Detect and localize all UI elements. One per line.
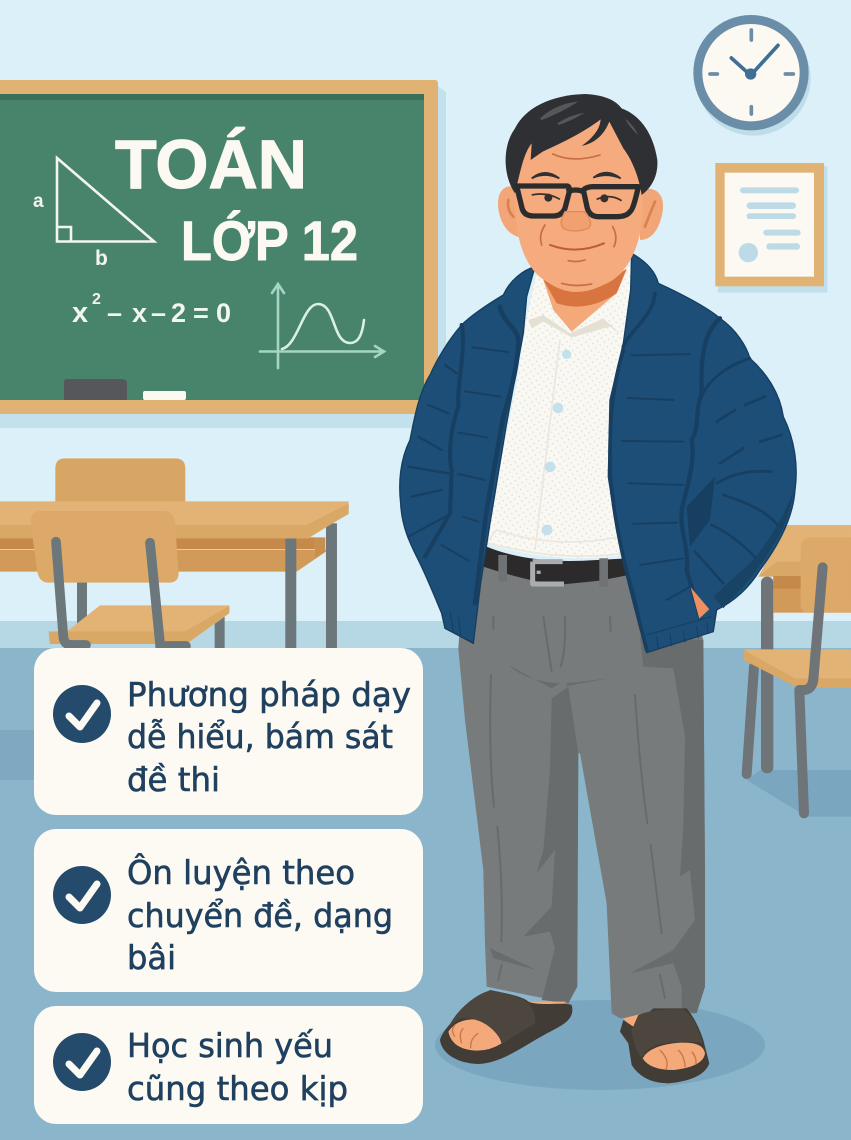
check icon [53, 685, 111, 743]
glasses [517, 186, 638, 217]
left sandal [440, 990, 572, 1064]
eyes [532, 194, 622, 201]
jacket right side [608, 253, 796, 653]
text: dễ hiểu, bám sát [127, 717, 393, 756]
floor shadow under feet [435, 1000, 765, 1090]
heading: TOÁN: TOÁN [115, 126, 307, 203]
feature card 3 [34, 1006, 423, 1124]
baseboard [0, 621, 851, 649]
jacket seams [408, 293, 793, 650]
feature card 1 [34, 648, 423, 815]
left desk and chairs [0, 458, 349, 648]
back chair [55, 458, 185, 502]
person: teacher [400, 94, 796, 1090]
eyebrows [532, 173, 621, 178]
belt [483, 546, 630, 587]
check icon [53, 1033, 111, 1091]
eraser [64, 379, 127, 400]
desk [758, 525, 851, 773]
hand in pocket [691, 587, 709, 619]
framed certificate [715, 163, 827, 293]
hair [506, 94, 657, 195]
triangle diagram: b [95, 247, 108, 270]
text [127, 852, 393, 977]
function graph [260, 284, 384, 368]
text: Phương pháp dạy [127, 675, 411, 714]
back chair leg [77, 580, 87, 648]
text: Ôn luyện theo [127, 852, 355, 892]
text: đề thi [127, 760, 220, 799]
text: cũng theo kịp [127, 1069, 348, 1108]
right desk and chair [743, 525, 851, 817]
feature card 2 [34, 829, 423, 992]
nose [561, 212, 591, 231]
equation: x [72, 297, 88, 329]
heading: LỚP 12: LỚP 12 [181, 209, 358, 272]
jacket cuffs [442, 612, 712, 649]
equation: 2 [92, 291, 101, 308]
chalk [143, 391, 186, 400]
background wall [0, 0, 851, 622]
text: bâi [127, 938, 176, 977]
triangle diagram: a [33, 191, 44, 212]
trousers [458, 565, 705, 1018]
equation: –x–2=0 [107, 298, 231, 328]
check icon [53, 866, 111, 924]
neck [543, 270, 627, 332]
desk [0, 501, 349, 648]
floor [0, 648, 851, 1140]
right sandal [620, 1008, 709, 1083]
shirt [486, 267, 632, 558]
wall clock [693, 15, 811, 136]
smile and creases [541, 154, 616, 285]
head [498, 94, 663, 332]
equation [72, 291, 231, 329]
chalkboard [0, 80, 446, 428]
front chair [31, 511, 229, 648]
jacket left side [400, 267, 535, 643]
jacket [400, 253, 796, 653]
face [516, 115, 643, 290]
chalkboard frame [0, 80, 446, 428]
text: chuyển đề, dạng [127, 896, 393, 935]
ears [498, 186, 520, 237]
chair [743, 537, 851, 813]
triangle diagram [33, 158, 154, 270]
text: Học sinh yếu [127, 1026, 333, 1065]
floor shadow [747, 770, 851, 817]
text [127, 675, 411, 799]
text [127, 1026, 348, 1108]
shirt buttons [542, 350, 571, 535]
